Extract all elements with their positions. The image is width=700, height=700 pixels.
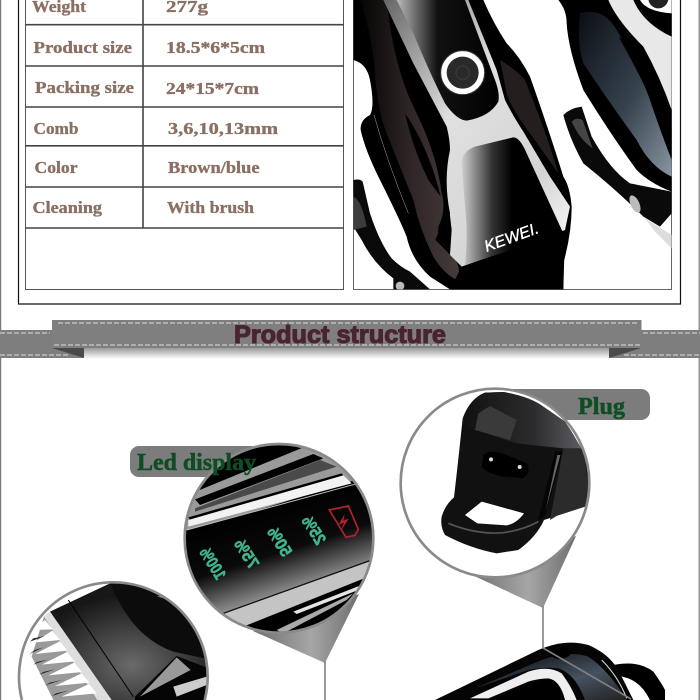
led level indicators: 25% — [298, 513, 330, 548]
brand logo: KEWEI. — [482, 220, 541, 256]
lower black panel — [462, 137, 563, 265]
led display photo — [186, 448, 372, 632]
brown side — [360, 0, 459, 280]
display window — [186, 514, 372, 613]
row: cleaning — [32, 198, 255, 217]
led level indicators: 100% — [196, 544, 230, 583]
main trimmer body — [353, 0, 572, 289]
low battery icon — [329, 506, 358, 537]
leader line — [324, 661, 326, 700]
right shoulder shading — [500, 60, 558, 173]
row: product size: Product size — [34, 38, 132, 57]
plug label text: Plug — [578, 394, 625, 420]
button recess — [397, 0, 499, 121]
pointer wedge — [253, 594, 359, 663]
callout: led display — [177, 443, 377, 643]
leader line — [543, 606, 631, 699]
blade edge band — [44, 612, 112, 700]
row: color: Brown/blue — [168, 158, 260, 177]
ribbon shadow — [84, 348, 609, 359]
second trimmer arm — [563, 107, 672, 227]
row: cleaning: With brush — [167, 198, 255, 217]
blade photo — [29, 583, 213, 700]
row: comb: 3,6,10,13mm — [168, 119, 278, 138]
row: packing size: 24*15*7cm — [166, 79, 259, 98]
lower handle — [450, 252, 564, 290]
row: color — [34, 158, 260, 177]
handle — [613, 663, 665, 700]
teeth shadows — [29, 636, 68, 696]
plug socket — [482, 452, 529, 478]
callout: blade — [19, 582, 213, 700]
body — [435, 643, 633, 700]
banner title: Product structure — [234, 321, 446, 349]
plug label pill — [470, 389, 650, 420]
blade teeth backing — [32, 612, 112, 700]
connector: led display — [253, 594, 359, 700]
ribbon main band — [52, 320, 642, 348]
led label pill — [130, 446, 260, 477]
left fold — [52, 348, 84, 358]
main trimmer arm — [353, 179, 430, 289]
section banner — [0, 320, 700, 359]
row: packing size: Packing size — [35, 78, 134, 97]
row: comb — [34, 119, 278, 138]
callout: plug — [401, 389, 590, 577]
product photo panel — [353, 0, 672, 290]
left ribbon tail — [0, 330, 84, 358]
row: product size: 18.5*6*5cm — [166, 38, 265, 57]
led level indicators: 50% — [263, 524, 296, 560]
connector: plug — [470, 536, 631, 699]
row: comb: Comb — [34, 119, 78, 138]
pointer wedge — [470, 536, 576, 608]
plug opening — [465, 502, 524, 525]
specification frame — [18, 0, 680, 304]
row: packing size — [35, 78, 259, 98]
plug photo — [441, 392, 590, 553]
row: cleaning: Cleaning — [32, 198, 103, 217]
silver trim — [383, 0, 570, 267]
row: product size — [34, 38, 265, 57]
led level indicators — [196, 513, 330, 583]
right fold — [609, 348, 641, 358]
row: weight — [32, 0, 209, 16]
clipper photo: brown and blue trimmers — [353, 0, 672, 290]
specification table — [26, 0, 344, 290]
blade teeth — [32, 620, 97, 697]
row: color: Color — [34, 158, 78, 177]
led level indicators: 75% — [230, 536, 263, 572]
second trimmer body — [558, 0, 672, 192]
right ribbon tail — [609, 330, 700, 358]
led label text: Led display — [137, 450, 256, 476]
clipper illustration: bottom right — [435, 643, 665, 700]
power button — [441, 51, 485, 95]
